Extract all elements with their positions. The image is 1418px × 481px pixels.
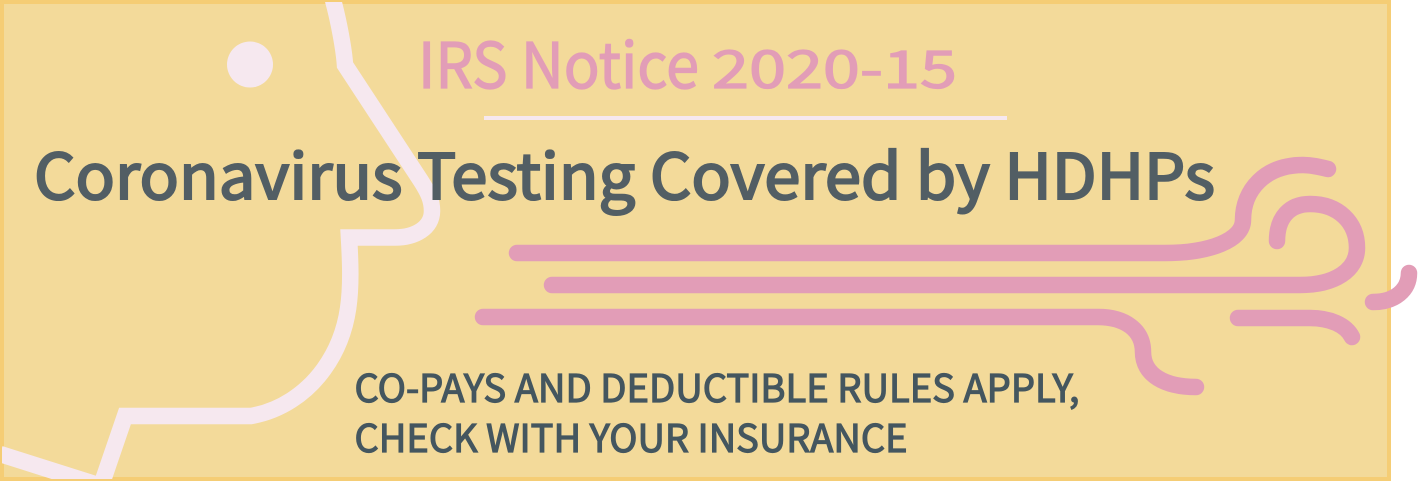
note line 1: CO-PAYS AND DEDUCTIBLE RULES APPLY, xyxy=(354,358,1080,413)
title: Coronavirus Testing Covered by HDHPs xyxy=(34,127,1215,218)
face outline upper xyxy=(0,0,432,481)
icon: face profile xyxy=(0,0,432,481)
wind line 3 xyxy=(483,317,1196,387)
heading number: 2020-15 xyxy=(712,28,957,103)
icon: eye xyxy=(227,42,273,88)
wind line 5 xyxy=(1373,273,1409,302)
divider xyxy=(484,116,1007,120)
wind line 2 xyxy=(552,204,1357,285)
icon: breath wind lines xyxy=(483,165,1409,387)
wind line 4 xyxy=(1238,318,1352,337)
heading: IRS Notice 2020-15 xyxy=(418,16,957,107)
text: co-pays note xyxy=(354,358,1080,463)
note line 2: CHECK WITH YOUR INSURANCE xyxy=(354,408,908,463)
wind line 1 xyxy=(517,165,1328,253)
heading words: IRS Notice xyxy=(418,16,699,107)
